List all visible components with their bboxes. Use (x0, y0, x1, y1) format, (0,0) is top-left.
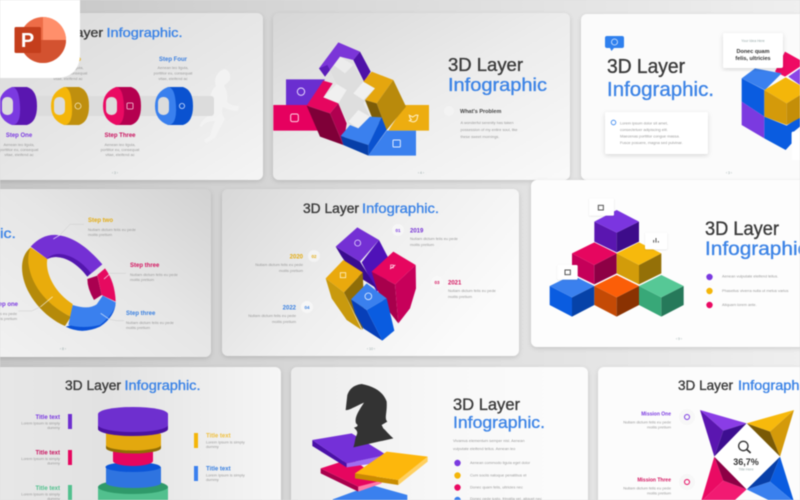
label: 2020 (255, 250, 320, 273)
label: step four: Step Four (159, 57, 188, 63)
label: 2022: Nullam dictum felis eu pede (248, 313, 296, 318)
label: step three blue (126, 311, 174, 330)
heading: slide 4 title fragment: ic. (0, 226, 16, 241)
label: step three blue: mollis pretium (126, 325, 150, 330)
label: step three (101, 133, 140, 157)
text block: what's problem (444, 106, 518, 139)
label: step two: porttitor eu, consequat (49, 70, 88, 76)
label: 2021: 2021 (448, 280, 462, 286)
panel: slide 1 card (0, 13, 263, 180)
label: purple title text (21, 414, 72, 430)
label: 2022: 04 (304, 305, 310, 310)
callout: your idea here: felis, ultricies (735, 56, 771, 62)
label: mission three (623, 474, 695, 496)
heading: slide 2 title: Infographic (448, 75, 547, 95)
runner silhouette (200, 69, 239, 143)
icon: PowerPoint logo panel (0, 0, 80, 78)
label: mission three: mollis pretium (647, 490, 671, 496)
label: 2021: mollis pretium (448, 294, 472, 299)
label: mission one: Nullam dictum felis eu pede (623, 420, 671, 424)
3D bars chart (326, 227, 416, 341)
text block: intro (453, 438, 525, 451)
bullet list: Cum sociis natoque penatibus et (470, 472, 527, 478)
label: 2019: 2019 (410, 228, 424, 234)
text box: description: Lorem ipsum dolor sit amet, (620, 120, 668, 126)
label: step one: Step One (6, 133, 33, 139)
label: blue title text: Title text (206, 466, 231, 472)
text box: description (605, 112, 708, 154)
label: step three pink: mollis pretium (130, 277, 154, 282)
label: purple title text: Lorem Ipsum is simply (21, 420, 60, 426)
label: step three pink: Step three (130, 263, 160, 269)
text block: what's problem: possession of my entire soul, like (460, 127, 518, 132)
icon: blue speech bubble (605, 36, 624, 51)
label: step two: Aenean leo ligula, (53, 65, 83, 70)
label: 2019: 01 (395, 228, 401, 233)
text block: intro: vulputate eleifend tellus. Aenean leo (453, 446, 515, 451)
heading: slide 5 title: 3D Layer (303, 201, 360, 216)
cylinder: step one (0, 87, 37, 125)
heading: slide 8 title: Infographic. (453, 413, 545, 432)
heading: slide 8 title: 3D Layer (453, 395, 520, 414)
label: 2022: mollis pretium (272, 319, 296, 324)
heading: slide 1 title: 3D Layer (46, 25, 104, 40)
label: blue title text: Lorem Ipsum is simply (206, 472, 245, 478)
label: step one (0, 302, 19, 321)
bullet list: Phasellus viverra nulla ut metus varius (722, 288, 788, 293)
heading: slide 7 title: Infographic. (124, 378, 200, 393)
heading: slide 9 title: 3D Layer (678, 378, 734, 393)
text block: intro: Vivamus elementum semper nisi. Aenean (453, 438, 525, 443)
label: purple title text: dummy (47, 425, 60, 430)
label: mission three: Mission Three (637, 478, 671, 484)
bullet list (706, 274, 788, 308)
page number: ‹ 8 › (60, 347, 67, 351)
panel: slide 8 card (291, 367, 588, 500)
label: step one: Aenean leo ligula, (4, 142, 34, 147)
label: step one: porttitor eu, consequat (0, 147, 39, 152)
heading: slide 1 title: Infographic. (106, 25, 182, 40)
callout: your idea here: Donec quam (736, 49, 770, 55)
stacked cylinders (98, 407, 168, 500)
label: mission one: Mission One (641, 412, 671, 418)
text block: what's problem: A wonderful serenity has taken (460, 120, 514, 125)
label: 2020: Nullam dictum felis eu pede (255, 262, 303, 267)
3D donut chart (18, 224, 126, 331)
label: step one: vitae, eleifend ac (4, 152, 34, 157)
label: 2019: Nullam dictum felis eu pede (410, 236, 458, 241)
label: mission three: Nullam dictum felis eu pede (623, 486, 671, 490)
label: yellow title text (194, 433, 245, 449)
stat: 36,7%: 36,7% (733, 457, 759, 467)
label: yellow title text: Lorem Ipsum is simply (206, 440, 245, 444)
heading: slide 6 title (705, 219, 800, 260)
page number: ‹ 9 › (676, 337, 683, 341)
label: pink title text: Title text (35, 450, 60, 456)
3D cube (742, 52, 800, 160)
heading: slide 5 title: Infographic. (362, 201, 439, 216)
panel: slide 7 card (0, 367, 281, 500)
heading: slide 3 title (607, 56, 714, 101)
text block: what's problem: What's Problem (460, 109, 501, 115)
text box: description: consectetuer adipiscing elit. (620, 127, 668, 132)
label: 2022 (248, 301, 313, 324)
text box: description: Maecenas porttitor congue massa. (620, 134, 680, 138)
callout: your idea here: Your Idea Here (741, 39, 765, 43)
bullet list: Donec quam felis, ultricies nec (470, 484, 523, 490)
label: 2019 (392, 224, 458, 247)
text block: what's problem: these sweet mornings. (460, 134, 499, 139)
label: step four: Aenean leo ligula, (158, 65, 188, 70)
label: green title text (21, 485, 72, 500)
page number: ‹ 10 › (367, 347, 376, 351)
label: step three blue: Step three (126, 311, 156, 317)
label: mission one: mollis pretium (647, 424, 671, 430)
label: mission one (623, 409, 695, 430)
label: 2021 (431, 276, 496, 299)
label: step three blue: Nullam dictum felis eu pede (126, 320, 174, 325)
label: step four (154, 57, 193, 81)
heading: slide 3 title: Infographic. (607, 79, 714, 101)
label: yellow title text: Title text (206, 434, 231, 440)
cylinder: step four (155, 87, 193, 125)
label: step three: vitae, eleifend ac (105, 152, 135, 157)
isometric social layer graphic (273, 42, 429, 156)
chess knight on plates (312, 384, 428, 500)
page number: ‹ 4 › (418, 171, 425, 175)
label: 2022: 2022 (283, 306, 297, 312)
page number: ‹ 3 › (112, 171, 119, 175)
heading: slide 7 title: 3D Layer (65, 378, 122, 393)
label: step one (0, 133, 39, 157)
label: 2020: mollis pretium (279, 268, 303, 273)
isometric cube pyramid (550, 198, 684, 317)
label: 2021: 03 (434, 280, 440, 285)
label: step two: Step Two (55, 57, 81, 63)
cylinder: step two (51, 87, 89, 125)
label: step three pink: Nullam dictum felis eu pede (130, 272, 178, 277)
label: blue title text (194, 466, 245, 482)
label: pink title text (21, 450, 72, 466)
stat: 36,7% (733, 457, 759, 472)
label: step four: porttitor eu, consequat (154, 70, 193, 76)
page number: ‹ 3 › (726, 171, 733, 175)
label: step two: Nullam dictum felis eu pede (88, 227, 136, 232)
label: green title text: Title text (35, 486, 60, 492)
label: green title text: Lorem Ipsum is simply (21, 492, 60, 496)
label: step two: mollis pretium (88, 232, 112, 237)
panel: slide 6 card (531, 180, 800, 347)
3D four-point star (700, 410, 794, 500)
stat: 36,7%: Title Here (738, 468, 754, 472)
label: 2021: Nullam dictum felis eu pede (448, 288, 496, 293)
connector bands (20, 96, 214, 116)
panel: slide 2 card (273, 13, 570, 180)
panel: slide 5 card (222, 189, 519, 356)
heading: slide 2 title (448, 55, 547, 95)
text box: description: Fusce posuere, magna sed pulvinar. (620, 140, 683, 145)
label: pink title text: dummy (47, 460, 60, 466)
bullet list: Aliquam lorem ante. (722, 302, 757, 307)
label: blue title text: dummy (206, 477, 219, 482)
label: 2020: 2020 (290, 254, 304, 260)
bullet list: Aenean commodo ligula eget dolor (470, 460, 531, 465)
label: step three pink (130, 263, 178, 282)
label: purple title text: Title text (35, 415, 60, 421)
panel: slide 4 card (0, 189, 211, 357)
heading: slide 6 title: Infographic (705, 239, 800, 260)
label: 2019: mollis pretium (410, 242, 434, 247)
heading: slide 2 title: 3D Layer (448, 55, 523, 75)
bullet list (454, 460, 542, 500)
label: pink title text: Lorem Ipsum is simply (21, 456, 60, 461)
label: step two: vitae, eleifend ac (53, 76, 83, 81)
icon: PowerPoint logo panel: P (21, 30, 34, 52)
label: yellow title text: dummy (206, 444, 219, 449)
label: step three: Step Three (104, 133, 136, 139)
callout: your idea here (723, 33, 783, 68)
label: step two (88, 218, 136, 237)
label: step four: vitae, eleifend ac (158, 76, 188, 81)
heading: slide 6 title: 3D Layer (705, 219, 780, 240)
label: step three: porttitor eu, consequat (101, 147, 140, 152)
label: step three: Aenean leo ligula, (105, 142, 135, 147)
bullet list: Aenean vulputate eleifend tellus. (722, 274, 778, 278)
label: step two: Step two (88, 218, 113, 224)
label: step two (49, 57, 88, 81)
panel: slide 3 card (581, 14, 800, 180)
panel: slide 9 card (598, 367, 800, 500)
heading: slide 8 title (453, 395, 545, 432)
heading: slide 3 title: 3D Layer (607, 56, 685, 78)
label: 2020: 02 (311, 254, 317, 259)
cylinder: step three (103, 87, 141, 125)
